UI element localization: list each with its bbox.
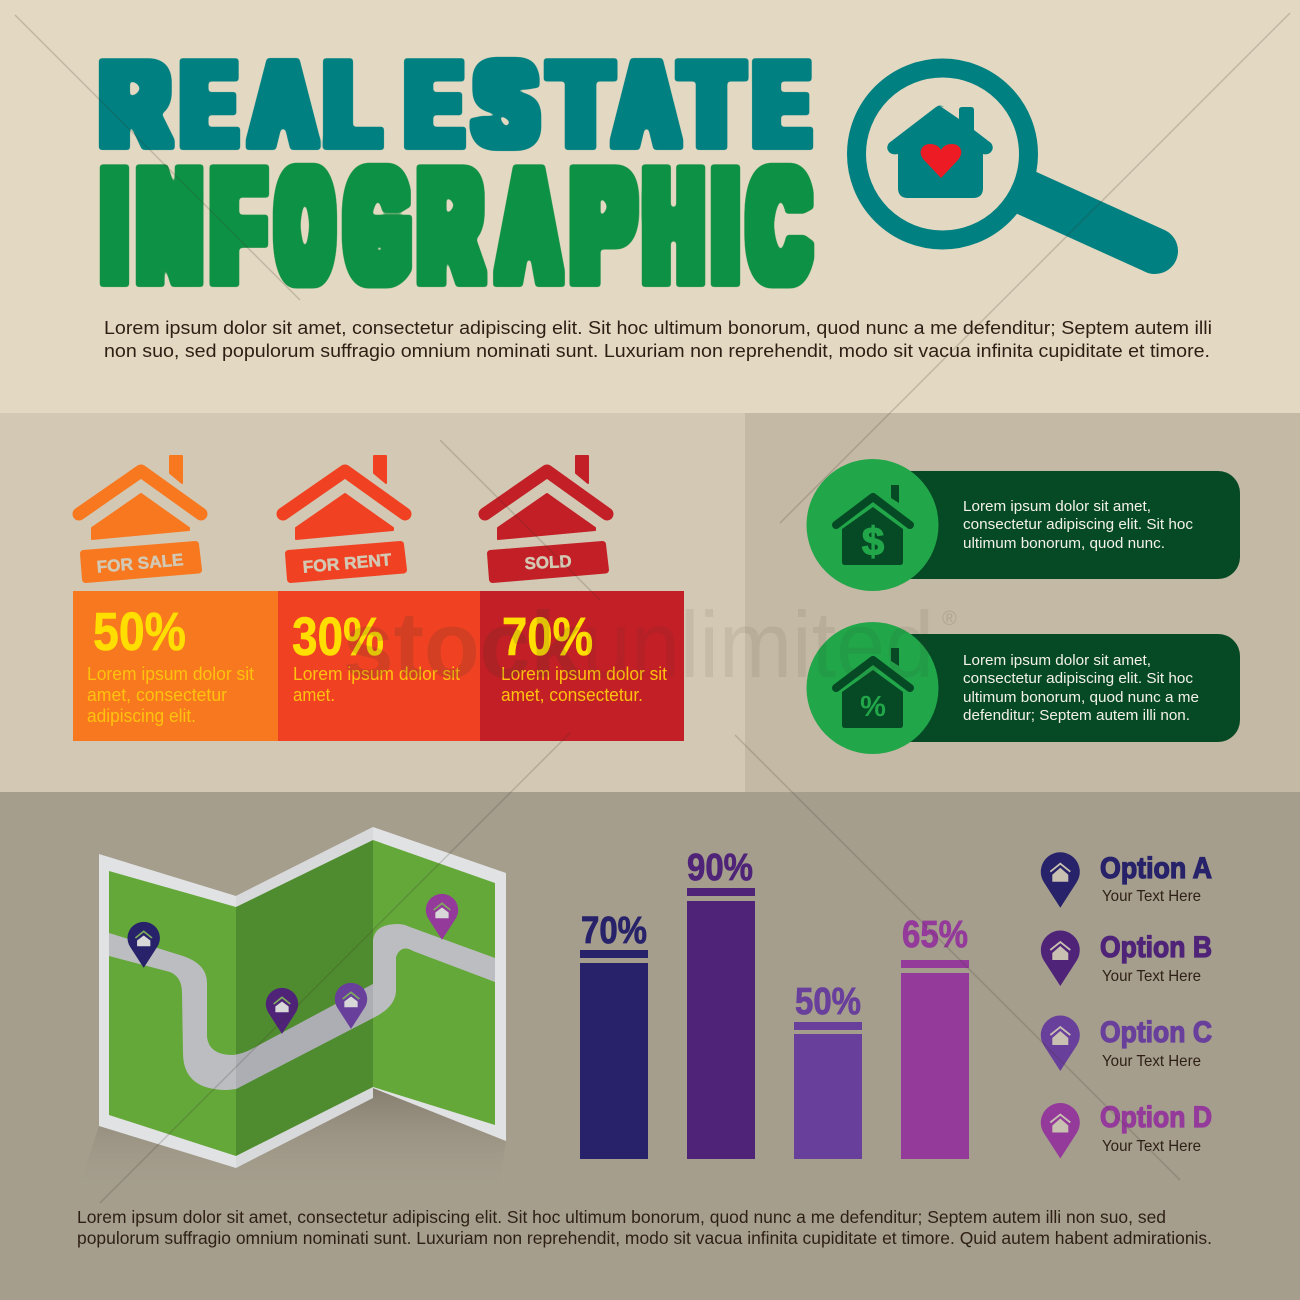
watermark: ® xyxy=(942,608,957,630)
map pin: navy xyxy=(128,922,160,968)
bar: 50%: 50% xyxy=(795,981,861,1023)
icon: for rent house: FOR RENT xyxy=(302,550,393,577)
panel: for sale stat: adipiscing elit. xyxy=(87,706,196,726)
panel: sold stat xyxy=(480,591,684,741)
bar: 70%: 70% xyxy=(581,910,647,952)
icon: for sale house: FOR SALE xyxy=(96,550,184,577)
icon: for rent house xyxy=(283,456,405,580)
title line: real estate: T xyxy=(683,38,740,171)
legend item: option C xyxy=(1041,1016,1212,1071)
intro paragraph: Lorem ipsum dolor sit amet, consectetur adipiscing elit. Sit hoc ultimum bonorum, quod nunc a me defenditur; Septem autem illi xyxy=(104,317,1212,338)
icon: heart xyxy=(921,144,961,178)
watermark: stock xyxy=(343,592,582,697)
title xyxy=(102,38,808,312)
title line: real estate: E xyxy=(184,38,234,171)
watermark xyxy=(343,592,957,697)
title line: real estate: E xyxy=(756,38,807,171)
panel: for sale stat: 50% xyxy=(93,602,186,662)
bar: 90%: 90% xyxy=(687,847,753,889)
legend xyxy=(1041,852,1212,1158)
title line: infographic: P xyxy=(572,139,633,312)
panel: for rent stat: Lorem ipsum dolor sit xyxy=(293,664,460,684)
panel: percent callout: Lorem ipsum dolor sit amet, xyxy=(963,653,1151,669)
bar: 50% xyxy=(794,981,862,1159)
legend item: option A xyxy=(1041,852,1212,908)
legend item: option A: Your Text Here xyxy=(1102,888,1201,905)
panel: percent callout: consectetur adipiscing elit. Sit hoc xyxy=(963,671,1193,687)
panel: for rent stat: amet. xyxy=(293,685,335,705)
icon: magnifying glass with house xyxy=(856,68,1155,251)
title line: real estate: R xyxy=(102,38,168,171)
map road xyxy=(109,924,495,1090)
title line: real estate: A xyxy=(252,38,314,171)
footer paragraph xyxy=(77,1207,1212,1248)
title line: real estate: L xyxy=(326,38,376,171)
watermark: unlimited xyxy=(582,592,934,697)
map pin: deep purple xyxy=(266,988,298,1034)
title line: infographic: H xyxy=(646,139,702,312)
map shadow xyxy=(78,1088,506,1195)
panel: percent callout: defenditur; Septem autem illi non. xyxy=(963,708,1190,724)
legend item: option C: Option C xyxy=(1100,1016,1212,1049)
icon: sold house xyxy=(485,456,607,580)
panel: for rent stat: 30% xyxy=(292,607,384,667)
title line: infographic: C xyxy=(750,139,808,312)
title line: infographic: N xyxy=(139,139,200,312)
panel: for sale stat xyxy=(73,591,278,741)
title line: real estate: T xyxy=(552,38,610,171)
intro paragraph xyxy=(104,317,1212,361)
legend item: option D: Your Text Here xyxy=(1102,1138,1201,1155)
panel: sold stat: amet, consectetur. xyxy=(501,685,643,705)
bar: 90% xyxy=(687,847,755,1159)
title line: infographic: R xyxy=(420,139,480,312)
panel: sold stat: Lorem ipsum dolor sit xyxy=(501,664,667,684)
legend item: option B: Your Text Here xyxy=(1102,968,1201,985)
legend item: option C: Your Text Here xyxy=(1102,1053,1201,1070)
panel: for sale stat: Lorem ipsum dolor sit xyxy=(87,664,254,684)
legend item: option B xyxy=(1041,931,1212,986)
icon: sold house: SOLD xyxy=(524,552,572,573)
map pin: violet xyxy=(335,983,367,1029)
title line: infographic: G xyxy=(348,139,408,312)
bar: 65%: 65% xyxy=(902,914,968,956)
bar chart xyxy=(580,847,969,1159)
legend item: option D xyxy=(1041,1101,1212,1158)
folded map xyxy=(99,827,506,1168)
title line: infographic: I xyxy=(104,139,125,312)
footer paragraph: populorum suffragio omnium nominati sunt. Luxuriam non reprehendit, modo sit vacua infinita cupiditate et timore. Quid autem habent admirationis. xyxy=(77,1228,1212,1248)
panel: price callout: Lorem ipsum dolor sit amet, xyxy=(963,499,1151,515)
icon: house with dollar sign: $ xyxy=(862,520,884,564)
legend item: option B: Option B xyxy=(1100,931,1212,964)
bar: 65% xyxy=(901,914,969,1159)
panel: for rent stat xyxy=(278,591,480,741)
icon: house with percent sign: % xyxy=(860,691,886,723)
panel: percent callout xyxy=(806,622,1240,754)
panel: percent callout: ultimum bonorum, quod nunc a me xyxy=(963,690,1199,706)
icon: house with percent sign xyxy=(836,648,910,728)
title line: real estate: S xyxy=(476,38,536,171)
legend item: option A: Option A xyxy=(1100,852,1212,885)
title line: infographic: O xyxy=(279,139,331,312)
legend item: option D: Option D xyxy=(1100,1101,1212,1134)
icon: house with dollar sign xyxy=(836,485,910,565)
footer paragraph: Lorem ipsum dolor sit amet, consectetur adipiscing elit. Sit hoc ultimum bonorum, quod nunc a me defenditur; Septem autem illi non suo, sed xyxy=(77,1207,1166,1227)
map pin: magenta xyxy=(426,894,458,940)
title line: real estate: A xyxy=(616,38,677,171)
intro paragraph: non suo, sed populorum suffragio omnium nominati sunt. Luxuriam non reprehendit, modo sit vacua infinita cupiditate et timore. xyxy=(104,340,1210,361)
icon: for sale house xyxy=(79,456,201,580)
panel: for sale stat: amet, consectetur xyxy=(87,685,227,705)
title line: infographic: A xyxy=(500,139,558,312)
title line: infographic: I xyxy=(714,139,736,312)
panel: price callout xyxy=(806,459,1240,591)
title line: real estate: E xyxy=(408,38,460,171)
bar: 70% xyxy=(580,910,648,1159)
panel: sold stat: 70% xyxy=(502,607,593,667)
panel: price callout: consectetur adipiscing elit. Sit hoc xyxy=(963,517,1193,533)
title line: infographic: F xyxy=(213,139,263,312)
panel: price callout: ultimum bonorum, quod nunc. xyxy=(963,536,1165,552)
